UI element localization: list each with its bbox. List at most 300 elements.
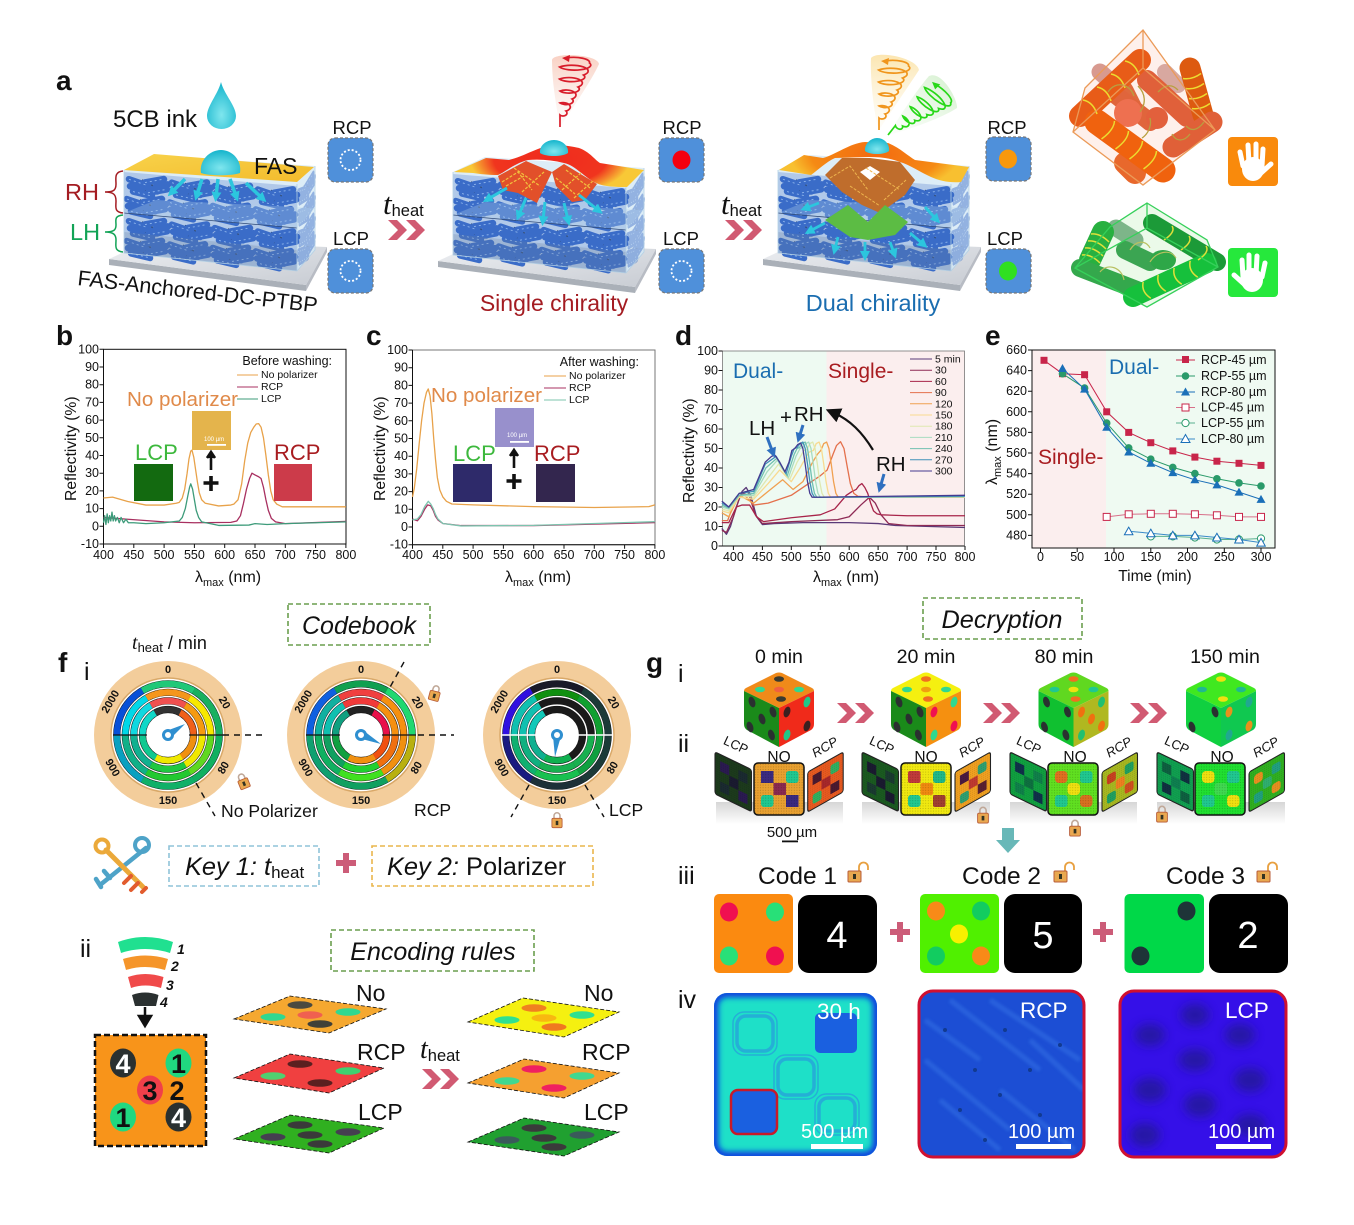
legend: [1176, 353, 1267, 446]
axis title: λ: [984, 477, 1001, 485]
legend: No polarizer: [569, 370, 626, 382]
time labels: 900: [491, 757, 511, 779]
polarizer label LCP: LCP: [333, 228, 369, 249]
diffusion arrows: [488, 188, 598, 220]
x tick labels: 800: [955, 550, 975, 564]
micrograph: 30 h overview: 30 h: [817, 999, 861, 1024]
code 2 digit: [1004, 894, 1082, 973]
needle: [552, 730, 562, 757]
x tick labels: 400: [402, 548, 423, 562]
arrow chevrons: [983, 703, 1020, 723]
heated surface: [454, 145, 644, 187]
dial: RCP: [287, 661, 435, 809]
panel label g: g: [646, 647, 663, 678]
die: 150 min: [1186, 672, 1256, 747]
time labels: 150: [352, 795, 370, 807]
y tick labels: 20: [704, 500, 718, 514]
y tick labels: [78, 342, 99, 551]
text: FAS-Anchored-DC-PTBP: FAS-Anchored-DC-PTBP: [76, 266, 319, 317]
time labels: 80: [216, 760, 232, 776]
legend: heating time: 300: [935, 466, 953, 478]
x tick labels: [93, 548, 356, 562]
heading box: Codebook: Codebook: [302, 612, 417, 640]
inner ring: [522, 700, 592, 770]
diffusion arrows: [172, 179, 262, 198]
y tick labels: -10: [390, 538, 408, 552]
text: LH: LH: [749, 417, 775, 440]
inset: RCP micrograph: [536, 464, 575, 502]
y tick labels: 90: [85, 360, 99, 374]
time labels: [100, 664, 232, 807]
inset: RCP micrograph: [274, 464, 312, 501]
tile set: 20 min: [862, 733, 990, 824]
x tick labels: 400: [723, 550, 744, 564]
heading box: Decryption: [923, 598, 1082, 639]
plus sign: [890, 922, 910, 942]
text: RH: RH: [65, 179, 99, 205]
x tick labels: 700: [584, 548, 605, 562]
text: Single-: Single-: [1038, 446, 1103, 469]
legend: heating time: 180: [935, 421, 953, 433]
x tick labels: 550: [810, 550, 831, 564]
curves: [104, 424, 346, 525]
label RCP: RCP: [1250, 734, 1282, 760]
x tick labels: 400: [93, 548, 114, 562]
x tick labels: 750: [614, 548, 635, 562]
plate: RCP after heating: [468, 1059, 619, 1098]
y tick labels: 80: [85, 378, 99, 392]
x tick labels: 100: [1104, 550, 1124, 564]
axis title: λ: [813, 569, 821, 586]
axis title: (nm): [984, 419, 1001, 456]
text: Single-: Single-: [828, 360, 893, 383]
heating label: heat: [428, 1047, 460, 1065]
plate: LCP before heating: [234, 1115, 384, 1153]
needle: [356, 730, 381, 744]
time labels: 0: [358, 664, 364, 676]
encoded orange tile: 3: [142, 1076, 158, 1106]
arrow: RH initial peak: [880, 474, 884, 488]
LCP box, green spot: [986, 249, 1031, 293]
code 1 colour tile: [714, 894, 793, 973]
polymer stack: [109, 155, 327, 291]
legend: heating time: 270: [935, 454, 953, 466]
die: 20 min: [891, 672, 961, 747]
text: No polarizer: No polarizer: [431, 384, 542, 407]
axis title: Reflectivity (%): [372, 396, 389, 501]
x tick labels: 450: [123, 548, 144, 562]
legend: heating time: 5 min: [935, 354, 961, 366]
panel: single chirality film: [438, 140, 656, 293]
label NO: NO: [1063, 749, 1087, 766]
inset: no polarizer micrograph: [192, 411, 231, 450]
y tick labels: 30: [85, 466, 99, 480]
legend: LCP: [261, 393, 281, 405]
legend: LCP-45 µm: [1201, 400, 1264, 414]
y tick labels: 90: [394, 361, 408, 375]
x tick labels: 500: [781, 550, 802, 564]
plate: RCP before heating: [234, 1054, 384, 1093]
plate: LCP after heating: [468, 1118, 619, 1156]
x tick labels: 450: [752, 550, 773, 564]
scale bar: 500 µm: [767, 824, 817, 841]
label RCP: RCP: [809, 734, 841, 760]
y tick labels: 480: [1006, 528, 1027, 542]
outer ring: [487, 665, 627, 805]
code 3 digit: 2: [1237, 915, 1259, 957]
arrow down: to codes: [996, 828, 1020, 853]
y tick labels: -10: [81, 537, 99, 551]
plate: no polarizer before heating: [234, 996, 386, 1033]
RCP tile: [1102, 752, 1138, 812]
y tick labels: 40: [85, 448, 99, 462]
legend: [237, 354, 332, 405]
text: No polarizer: No polarizer: [127, 388, 238, 411]
RCP box, red spot: [659, 138, 704, 182]
icon: lock: [236, 772, 251, 790]
text: FAS: FAS: [254, 153, 297, 179]
text: Single chirality: Single chirality: [480, 290, 629, 316]
y tick labels: 500: [1006, 508, 1027, 522]
legend: heating time: [910, 354, 961, 478]
brace LH: [105, 215, 123, 252]
panel label e: e: [985, 320, 1001, 351]
RCP box, no colour: [328, 138, 373, 182]
icon: green circular light helix: [888, 75, 957, 154]
legend: heating time: 240: [935, 443, 953, 455]
y tick labels: 560: [1006, 446, 1027, 460]
chart: time-dependent spectra: [697, 344, 975, 564]
text: RH: RH: [876, 453, 906, 476]
time labels: 150: [159, 795, 177, 807]
plus sign: [336, 853, 356, 873]
LCP box, no colour: [659, 249, 704, 293]
y tick labels: 40: [704, 461, 718, 475]
sub-panel label i: i: [678, 660, 684, 688]
encoded orange tile: 2: [169, 1076, 185, 1106]
text: Code 1: Code 1: [758, 863, 837, 890]
time label: 150 min: [1190, 646, 1260, 668]
axis title: max: [992, 456, 1004, 477]
arrow chevrons: [725, 220, 762, 240]
legend: heating time: 60: [935, 376, 947, 388]
code 1 digit: 4: [826, 915, 848, 957]
legend: RCP-80 µm: [1201, 385, 1267, 399]
x tick labels: 200: [1177, 550, 1198, 564]
legend: RCP: [569, 382, 591, 394]
text: LH: LH: [70, 219, 100, 245]
y tick labels: 100: [697, 344, 718, 358]
x tick labels: 300: [1251, 550, 1271, 564]
yellow FAS layer: [124, 154, 314, 182]
icon: orange circular light helix: [871, 55, 919, 130]
second ring: [110, 677, 226, 793]
axis title: (nm): [534, 569, 571, 586]
dashed guides: [196, 735, 262, 816]
icon: ink drop: [207, 82, 236, 129]
time labels: 150: [548, 795, 566, 807]
micrograph: LCP: [1120, 991, 1286, 1157]
text: 5CB ink: 5CB ink: [113, 106, 198, 133]
icon: orange hand: [1228, 137, 1278, 186]
y tick labels: [697, 344, 718, 553]
heating label: t: [721, 186, 731, 221]
tile set: 150 min: [1157, 733, 1285, 824]
text: heating time unit: heat: [138, 640, 163, 655]
chart: reflectivity before washing: [58, 320, 1288, 1157]
y tick labels: 600: [1006, 405, 1027, 419]
panel label d: d: [675, 320, 692, 351]
time labels: 0: [165, 664, 171, 676]
text: heating time unit: / min: [163, 633, 207, 653]
icon: open lock: [1054, 862, 1074, 882]
text: No: No: [356, 980, 385, 1006]
legend: ring colour codes: [118, 937, 185, 1010]
RCP box, orange spot: [986, 137, 1031, 181]
polarizer label LCP: LCP: [663, 228, 699, 249]
label LCP: LCP: [721, 733, 751, 757]
x tick labels: [1037, 550, 1271, 564]
y tick labels: 20: [85, 484, 99, 498]
die: 0 min: [744, 672, 814, 747]
y tick labels: [387, 343, 408, 552]
droplet: [540, 140, 568, 156]
x tick labels: 0: [1037, 550, 1044, 564]
icon: lock: [978, 807, 988, 823]
legend: RCP: [261, 381, 283, 393]
x tick labels: 50: [1070, 550, 1084, 564]
inner ring: [326, 700, 396, 770]
third ring: [510, 688, 604, 782]
label RCP: RCP: [1103, 734, 1135, 760]
key 1 box: heat: [271, 863, 304, 882]
second ring: [303, 677, 419, 793]
x tick labels: 550: [493, 548, 514, 562]
arrow: RH peak: [799, 425, 803, 438]
icon: lock: [428, 685, 442, 702]
code 2 colour tile: [920, 894, 999, 973]
x tick labels: 700: [897, 550, 918, 564]
die: 80 min: [1038, 672, 1108, 747]
y tick labels: 50: [394, 432, 408, 446]
y tick labels: 0: [92, 519, 99, 533]
y tick labels: 0: [711, 539, 718, 553]
y tick labels: 0: [401, 520, 408, 534]
x tick labels: 700: [275, 548, 296, 562]
y tick labels: 100: [387, 343, 408, 357]
y tick labels: 620: [1006, 384, 1027, 398]
legend: Before washing:: [242, 354, 332, 368]
text: RH: RH: [794, 403, 824, 426]
micrograph: 30 h overview: 500 µm: [801, 1121, 868, 1143]
x tick labels: 500: [463, 548, 484, 562]
outer ring: [291, 665, 431, 805]
legend: heating time: 30: [935, 365, 947, 377]
plus: [506, 474, 522, 489]
text: RCP: RCP: [357, 1039, 406, 1065]
plus: [204, 476, 218, 491]
plate: no polarizer after heating: [468, 998, 619, 1037]
y tick labels: 60: [704, 422, 718, 436]
LCP tile: [1010, 752, 1046, 812]
text: LCP: LCP: [135, 440, 178, 465]
panel label b: b: [56, 320, 73, 351]
micrograph: RCP: 100 µm: [1008, 1121, 1075, 1143]
outer ring: [98, 665, 238, 805]
time labels: 80: [605, 760, 621, 776]
text: RCP: RCP: [534, 441, 580, 466]
x tick labels: 650: [245, 548, 265, 562]
code 3 digit: [1209, 894, 1288, 973]
panel label a: a: [56, 65, 72, 96]
dashed guides: [511, 785, 604, 817]
NO tile: [901, 763, 951, 815]
legend: ring colour codes: 4: [159, 994, 168, 1010]
micrograph: 30 h overview: [714, 993, 877, 1156]
axis title: (nm): [224, 569, 261, 586]
key 2 box: Key 2: Polarizer: [387, 853, 567, 881]
time labels: 80: [409, 760, 425, 776]
y tick labels: 100: [78, 342, 99, 356]
code 3 colour tile: [1124, 894, 1204, 973]
encoded orange tile: 1: [115, 1103, 131, 1133]
time labels: 20: [409, 695, 425, 711]
icon: lock: [1070, 820, 1080, 836]
encoded orange tile: 4: [115, 1049, 131, 1079]
time label: 20 min: [897, 646, 955, 668]
x tick labels: 750: [305, 548, 326, 562]
y tick labels: 70: [704, 402, 718, 416]
sub-panel label i: i: [84, 658, 90, 686]
RCP tile: [1249, 752, 1284, 812]
arrow chevrons: [388, 220, 425, 240]
text: LCP: LCP: [584, 1099, 629, 1125]
icon: crossed keys: [96, 838, 149, 892]
arrow down: [139, 1007, 151, 1026]
polarizer label RCP: RCP: [332, 117, 372, 138]
sub-panel label ii: ii: [678, 730, 689, 758]
icon: open lock: [848, 862, 868, 882]
tile set: 80 min: [1010, 733, 1138, 824]
sub-panel label iii: iii: [678, 862, 695, 890]
label RCP: RCP: [956, 734, 988, 760]
y tick labels: 580: [1006, 425, 1027, 439]
legend: ring colour codes: 2: [170, 958, 179, 974]
x tick labels: 500: [154, 548, 175, 562]
micrograph: LCP: 100 µm: [1208, 1121, 1275, 1143]
inset: no polarizer micrograph: 100 µm: [507, 433, 527, 439]
brace RH: [105, 171, 123, 213]
x tick labels: 800: [335, 548, 356, 562]
x tick labels: 150: [1140, 550, 1161, 564]
y tick labels: 20: [394, 485, 408, 499]
inset: LCP micrograph: [134, 464, 173, 501]
LCP tile: [715, 752, 752, 812]
legend: ring colour codes: 1: [177, 941, 185, 957]
y tick labels: 540: [1006, 467, 1027, 481]
text: LCP: LCP: [609, 800, 643, 820]
text: Dual-: Dual-: [1109, 356, 1159, 379]
sub-panel label iv: iv: [678, 986, 697, 1014]
text: Code 2: Code 2: [962, 863, 1041, 890]
time label: 0 min: [755, 646, 803, 668]
axis title: (nm): [842, 569, 879, 586]
arrow: [510, 450, 518, 468]
text: RCP: RCP: [414, 800, 451, 820]
x tick labels: 650: [554, 548, 574, 562]
heating label: heat: [392, 202, 424, 220]
chart: wavelength vs time: [1006, 343, 1275, 564]
legend: RCP-45 µm: [1201, 353, 1267, 367]
encoded orange tile: [95, 1035, 206, 1146]
droplet: [201, 150, 240, 175]
orange helical cube: [1073, 30, 1215, 185]
time labels: 20: [605, 695, 621, 711]
axis title: max: [203, 577, 224, 589]
y tick labels: 70: [394, 396, 408, 410]
dashed guides: [389, 662, 454, 735]
icon: lock: [1157, 806, 1167, 822]
legend: RCP-55 µm: [1201, 369, 1267, 383]
y tick labels: 520: [1006, 487, 1027, 501]
axis title: Reflectivity (%): [681, 398, 698, 503]
text: LCP: LCP: [358, 1099, 403, 1125]
panel label c: c: [366, 320, 382, 351]
legend: LCP: [569, 394, 589, 406]
axis title: max: [513, 577, 534, 589]
x tick labels: 450: [432, 548, 453, 562]
polymer stack: [438, 157, 656, 293]
arrow: LH peak: [767, 437, 773, 453]
axis title: Time (min): [1118, 568, 1192, 585]
key 2 box: [372, 846, 593, 886]
x tick labels: 750: [926, 550, 946, 564]
arrow chevrons: [422, 1069, 459, 1089]
LCP box, no colour: [328, 249, 373, 293]
micrograph: RCP: RCP: [1020, 998, 1068, 1023]
y tick labels: 90: [704, 364, 718, 378]
spectra curves: [722, 442, 965, 534]
second ring: [499, 677, 615, 793]
panel: FAS-anchored film: [109, 150, 327, 291]
code 1 digit: [798, 895, 877, 973]
LCP tile: [862, 752, 898, 812]
y tick labels: 60: [394, 414, 408, 428]
icon: red circular light helix: [552, 55, 599, 127]
y tick labels: 660: [1006, 343, 1027, 357]
label LCP: LCP: [867, 733, 897, 757]
x tick labels: [402, 548, 665, 562]
code 2 digit: 5: [1032, 915, 1054, 957]
legend: heating time: 150: [935, 410, 953, 422]
droplet: [865, 138, 889, 154]
brown chiral blocks: [825, 158, 915, 213]
panel label f: f: [58, 647, 68, 678]
text: RCP: RCP: [582, 1039, 631, 1065]
y tick labels: 40: [394, 449, 408, 463]
LCP tile: [1157, 752, 1194, 812]
dial: no polarizer: [94, 661, 242, 809]
sub-panel label ii: ii: [80, 935, 91, 963]
y tick labels: 80: [704, 383, 718, 397]
y tick labels: 50: [85, 431, 99, 445]
green chiral blocks: [825, 205, 908, 240]
inset: no polarizer micrograph: [495, 408, 534, 447]
NO tile: [754, 763, 804, 815]
micrograph: RCP: [919, 991, 1084, 1157]
heated surface: [779, 142, 969, 182]
y tick labels: 70: [85, 395, 99, 409]
